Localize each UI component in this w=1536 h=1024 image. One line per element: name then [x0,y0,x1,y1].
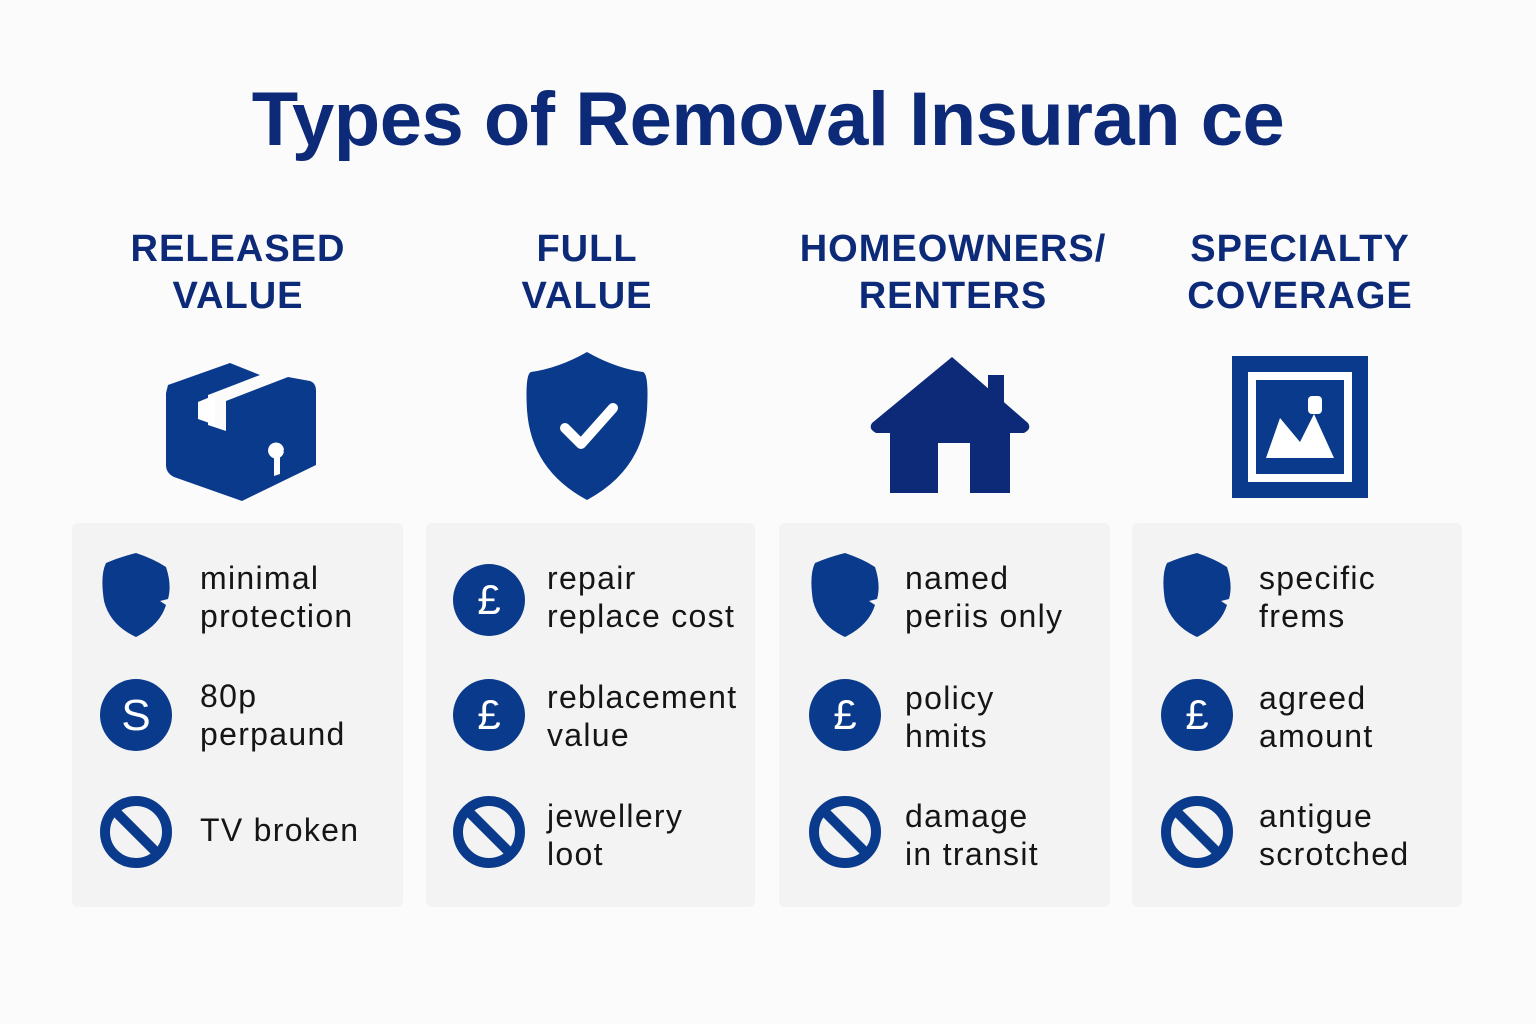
text: specific frems: specific [1259,560,1376,596]
icon: dollar [100,679,172,751]
text: damage in transit [905,798,1039,872]
icon: framed picture [1232,356,1368,498]
icon: shield check [526,352,648,500]
panel: specialty coverage [1132,523,1462,907]
icon: pound 2 [453,679,525,751]
text: agreed amount [1259,680,1374,754]
text: 80p perpaund: perpaund [200,716,346,752]
heading: released value [131,228,345,317]
text: repair replace cost: repair [547,560,637,596]
text: agreed amount: agreed [1259,680,1366,716]
text: repair replace cost: replace cost [547,598,735,634]
text: reblacement value: value [547,717,630,753]
text: jewellery loot [546,798,683,872]
text: 80p perpaund: 80p [200,678,257,714]
text: antigue scrotched: antigue [1259,798,1373,834]
heading: homeowners/renters: RENTERS [859,275,1047,317]
icon: ban 1 [105,801,167,863]
icon: pound 3 [809,679,881,751]
text: policy hmits: hmits [905,718,988,754]
heading: full value [522,228,652,317]
heading: specialty coverage: SPECIALTY [1190,228,1410,270]
icon: ban 4 [1166,801,1228,863]
text: TV broken: TV broken [200,812,359,848]
heading: released value: VALUE [173,275,303,317]
heading: homeowners/renters: HOMEOWNERS/ [800,228,1106,270]
text: agreed amount: amount [1259,718,1374,754]
icon: house [870,357,1030,493]
title: Types of Removal Insuran ce [252,77,1284,162]
panel: released value [72,523,403,907]
heading: homeowners/renters [800,228,1106,317]
text: minimal protection [200,560,354,634]
text: named periis only [905,560,1063,634]
icon: ban 3 [814,801,876,863]
text: policy hmits [905,680,995,754]
text: specific frems: frems [1259,598,1346,634]
text: named periis only: named [905,560,1009,596]
icon: dollar: S [121,691,151,740]
text: damage in transit: damage [905,798,1028,834]
text: minimal protection: minimal [200,560,319,596]
text: reblacement value: reblacement [547,679,737,715]
heading: released value: RELEASED [131,228,345,270]
text: jewellery loot: loot [547,836,604,872]
heading: specialty coverage [1187,228,1413,317]
icon: pound 4 [1161,679,1233,751]
panel: homeowners/renters [779,523,1110,907]
text: reblacement value [547,679,737,753]
heading: specialty coverage: COVERAGE [1187,275,1413,317]
text: specific frems [1259,560,1376,634]
text: antigue scrotched: scrotched [1259,836,1409,872]
heading: full value: VALUE [522,275,652,317]
text: antigue scrotched [1259,798,1409,872]
icon: shield 3 [811,553,879,637]
icon: pound 1 [453,564,525,636]
text: named periis only: periis only [905,598,1063,634]
panel: full value [426,523,755,907]
icon: shield 1 [102,553,170,637]
text: jewellery loot: jewellery [547,798,683,834]
text: 80p perpaund [200,678,346,752]
icon: box [166,363,316,501]
icon: shield 4 [1163,553,1231,637]
text: minimal protection: protection [200,598,354,634]
icon: ban 2 [458,801,520,863]
text: repair replace cost [547,560,735,634]
text: damage in transit: in transit [905,836,1039,872]
text: policy hmits: policy [905,680,995,716]
heading: full value: FULL [536,228,638,270]
